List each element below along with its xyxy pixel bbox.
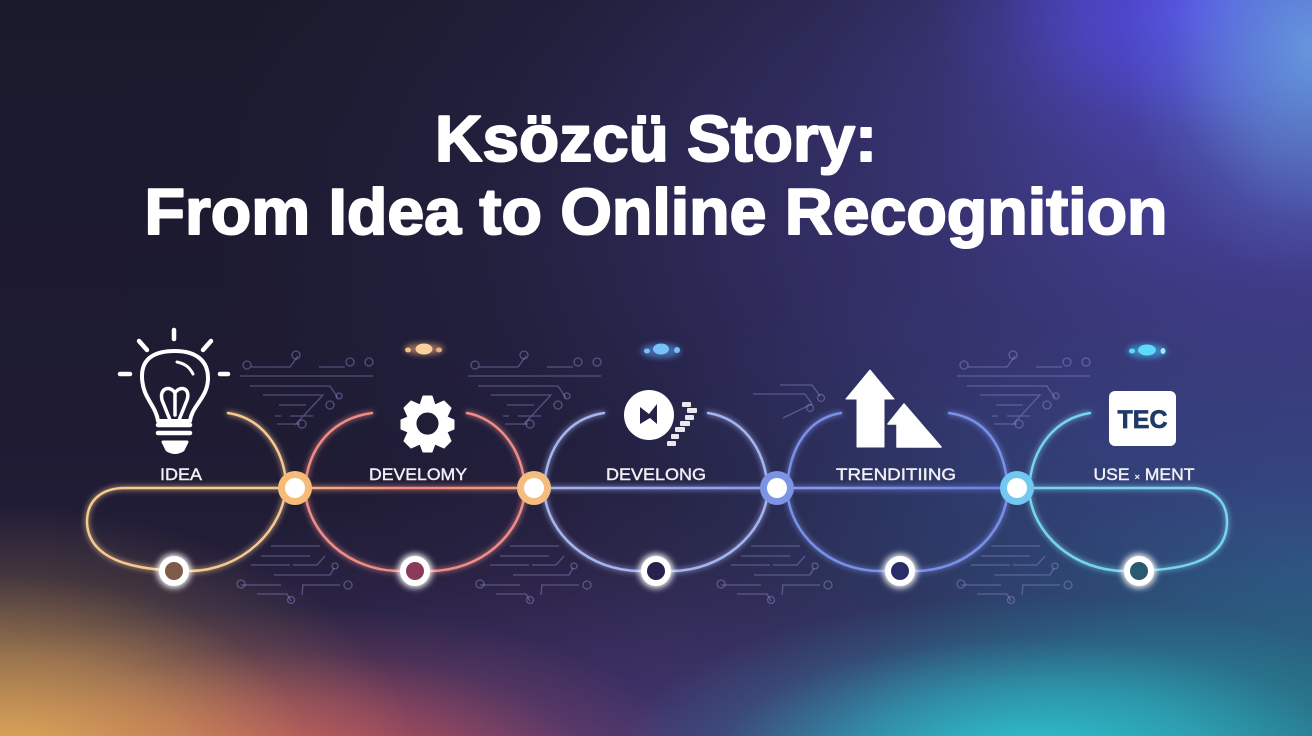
icon: play circle with bars	[624, 390, 697, 446]
title: From Idea to Online Recognition	[144, 175, 1168, 248]
loop 1: idea	[87, 413, 295, 571]
step labels: TRENDITIING	[836, 465, 956, 484]
step labels: DEVELONG	[606, 465, 706, 484]
icon: up arrows	[846, 370, 941, 447]
glowing satellites	[404, 343, 1167, 358]
bottom nodes	[162, 559, 1151, 583]
loop 2: development	[305, 413, 525, 571]
icon: light bulb	[120, 330, 228, 452]
title	[144, 102, 1168, 248]
step labels	[160, 465, 1194, 484]
loop 4: trending	[787, 413, 1008, 571]
step labels: IDEA	[160, 465, 203, 484]
icon: TEC badge: TEC	[1118, 406, 1168, 434]
junction nodes	[278, 471, 1034, 505]
icon: TEC badge	[1109, 391, 1176, 446]
circuit decorations	[237, 351, 1090, 604]
step labels: DEVELOMY	[369, 465, 467, 484]
timeline: connecting loops	[87, 413, 1227, 571]
loop 3: developing	[544, 413, 768, 571]
title: Ksözcü Story:	[435, 102, 877, 175]
loop 5: usage	[1017, 413, 1227, 571]
step labels: USE × MENT	[1094, 465, 1194, 484]
icon: gear	[401, 396, 454, 452]
